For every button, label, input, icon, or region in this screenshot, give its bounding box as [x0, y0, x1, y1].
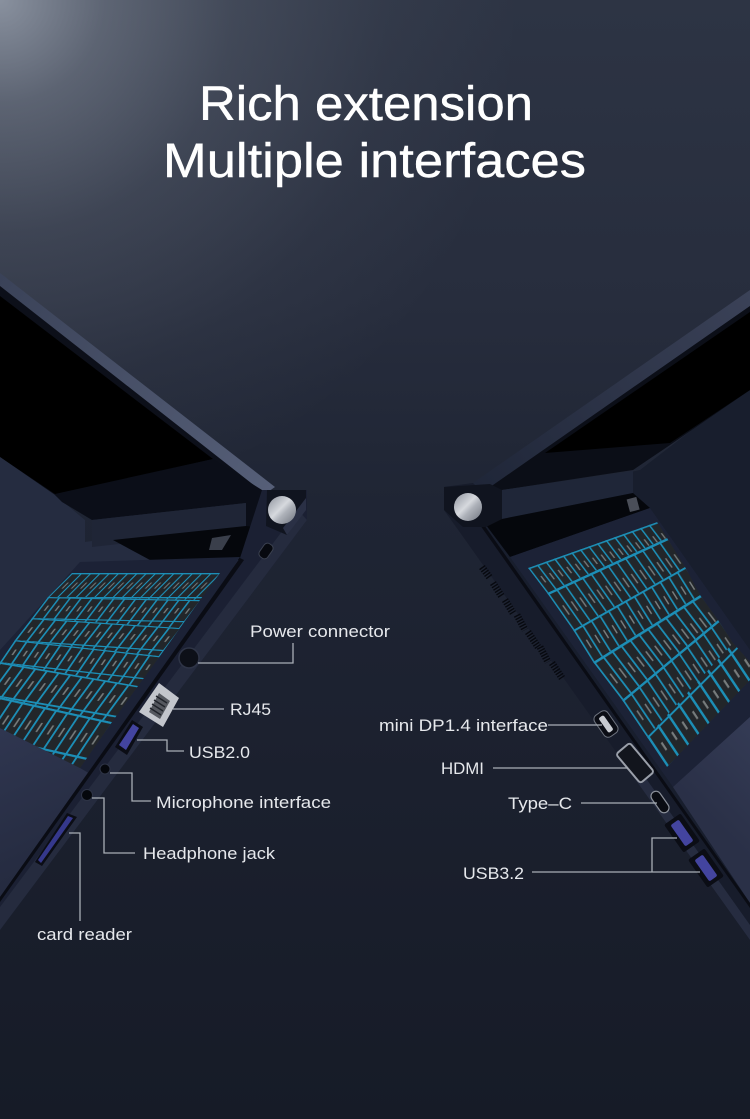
port: USB2.0 [115, 720, 143, 755]
left laptop [0, 273, 307, 930]
left hinge bar [92, 503, 246, 547]
port: card reader [35, 813, 77, 866]
port: headphone [82, 790, 92, 800]
right vents [482, 567, 562, 678]
left latch [209, 535, 231, 550]
label: USB2.0: USB2.0 [189, 743, 250, 762]
label: USB3.2: USB3.2 [463, 864, 524, 883]
port: USB3.2 upper [664, 813, 700, 853]
label: mini DP1.4 interface: mini DP1.4 interface [379, 716, 548, 735]
right lid edge [473, 290, 750, 492]
left keyboard bevel [0, 557, 240, 780]
right laptop [444, 290, 750, 940]
left hinge disc [268, 496, 296, 524]
port: Type-C [649, 789, 671, 815]
label: Microphone interface [110, 773, 331, 812]
left palm rest [0, 728, 92, 897]
right latch [627, 497, 640, 512]
left screen [0, 286, 265, 503]
port: side slot [257, 542, 275, 560]
port: RJ45 [139, 683, 179, 727]
label: USB3.2 [463, 838, 700, 883]
port: USB3.2 lower [688, 848, 724, 888]
right hinge disc [454, 493, 482, 521]
label: card reader [37, 833, 132, 944]
right hinge bar [502, 471, 633, 519]
label: Power connector: Power connector [250, 622, 390, 641]
label: RJ45 [173, 700, 271, 719]
port: microphone [100, 764, 110, 774]
left side edge [0, 490, 307, 930]
title [163, 78, 586, 188]
left under-bar shadow [113, 526, 262, 560]
port: HDMI [616, 743, 654, 783]
label: Headphone jack: Headphone jack [143, 844, 276, 863]
right screen [483, 306, 750, 492]
right deck [470, 385, 750, 903]
title: Multiple interfaces [163, 135, 586, 188]
left lid edge [0, 273, 275, 494]
label: Microphone interface: Microphone interface [156, 793, 331, 812]
right hinge shell [444, 484, 502, 527]
left hinge strip [55, 459, 266, 530]
left keyboard [0, 573, 220, 768]
right keyboard [528, 522, 750, 767]
label: Power connector [198, 622, 390, 663]
left deck upper [0, 457, 240, 770]
label: Type-C: Type–C [508, 794, 572, 813]
port: power connector [179, 648, 199, 668]
label: USB2.0 [137, 740, 250, 762]
right bevel [510, 508, 750, 787]
right palm rest [673, 717, 750, 903]
left hinge shell [266, 490, 306, 535]
right under-bar shadow [486, 493, 650, 557]
label: Headphone jack [92, 798, 276, 863]
label: card reader: card reader [37, 925, 132, 944]
label: HDMI: HDMI [441, 759, 484, 778]
label: RJ45: RJ45 [230, 700, 271, 719]
title: Rich extension [199, 78, 533, 131]
port: mini DP [592, 709, 620, 739]
right side edge [444, 483, 750, 940]
